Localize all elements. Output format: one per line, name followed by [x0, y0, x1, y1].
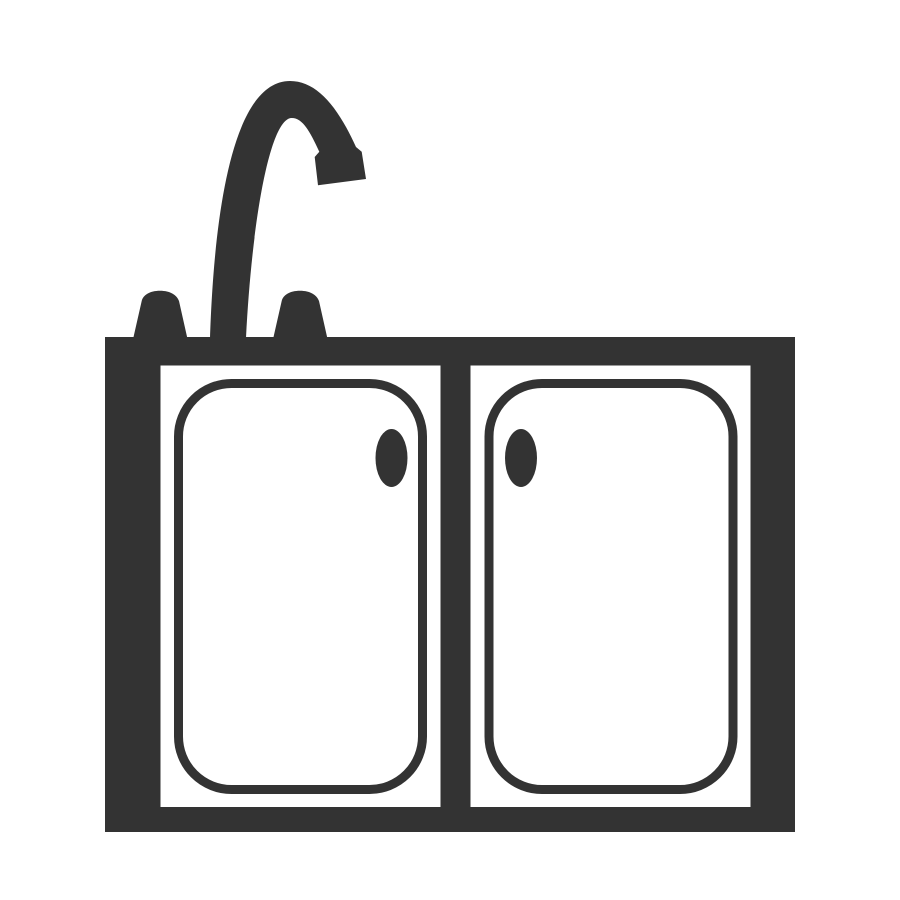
cabinet body: [105, 337, 795, 832]
panel: right door opening: [470, 366, 750, 807]
panel: left door opening: [160, 366, 440, 807]
panel: left door outline: [178, 384, 422, 790]
panel: right door outline: [489, 384, 733, 790]
icon: right door knob: [505, 429, 537, 487]
icon: left door knob: [376, 429, 408, 487]
icon: left tap handle: [133, 291, 187, 338]
icon: right tap handle: [273, 291, 327, 338]
icon: faucet: [210, 81, 366, 338]
